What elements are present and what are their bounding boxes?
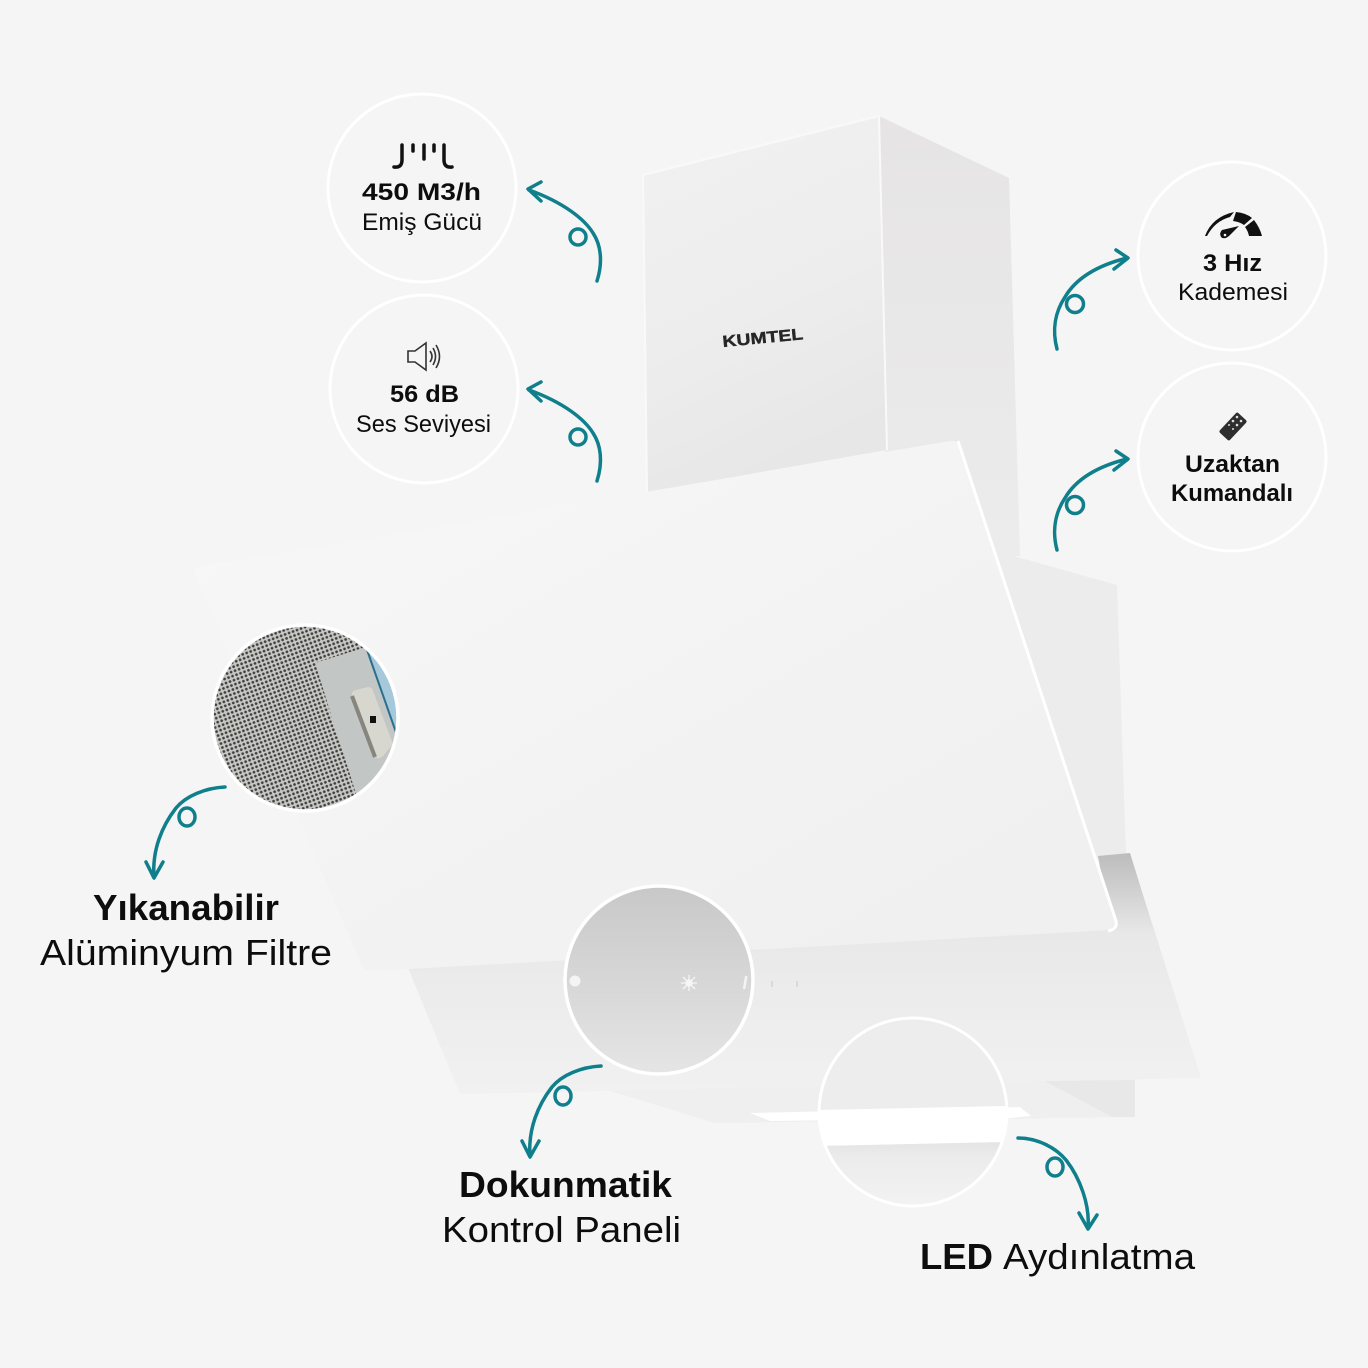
icon: speed gauge <box>1205 212 1262 238</box>
filter frame <box>315 648 395 794</box>
caption: Yıkanabilir Alüminyum Filtre: Yıkanabilir <box>93 887 279 928</box>
label: 56 dB: 56 dB <box>390 381 459 408</box>
caption: LED Aydınlatma: LED <box>920 1236 993 1277</box>
chimney side panel <box>879 116 1020 556</box>
detail circle: touch control panel <box>565 886 753 1074</box>
caption: Yıkanabilir Alüminyum Filtre <box>40 887 332 973</box>
detail circle: aluminium filter <box>210 624 400 812</box>
shaded wedge behind glass <box>1098 853 1155 934</box>
label: Kumandalı: Kumandalı <box>1171 480 1293 507</box>
callout: Uzaktan Kumandalı <box>1138 363 1326 551</box>
blue glass reflection <box>369 653 396 728</box>
label: 450 M3/h: 450 M3/h <box>362 179 481 206</box>
lower panel <box>408 853 1201 1094</box>
icon: speaker <box>408 343 440 370</box>
chimney front panel <box>643 116 887 492</box>
arrow: to Uzaktan Kumandalı <box>1055 451 1128 550</box>
label: 3 Hız: 3 Hız <box>1203 250 1262 277</box>
power button <box>570 976 580 986</box>
LED strip <box>750 1107 1031 1121</box>
caption: Yıkanabilir Alüminyum Filtre: Alüminyum Filtre <box>40 932 332 973</box>
glass front panel <box>194 441 1116 971</box>
product: cooker hood <box>194 116 1201 1123</box>
arrow: from LED circle <box>1018 1138 1097 1229</box>
light button <box>681 975 697 991</box>
caption: LED Aydınlatma: Aydınlatma <box>1003 1236 1196 1277</box>
label: Uzaktan: Uzaktan <box>1185 451 1280 478</box>
label: Emiş Gücü: Emiş Gücü <box>362 209 482 236</box>
caption: LED Aydınlatma <box>920 1236 1196 1277</box>
callout: 56 dB <box>330 295 518 483</box>
arrow: to 56 dB <box>528 382 600 481</box>
touch dots outside the circle <box>771 981 798 987</box>
arrow: to 450 M3/h <box>528 182 600 281</box>
caption: Dokunmatik Kontrol Paneli: Dokunmatik <box>459 1164 673 1205</box>
hood rear body <box>985 548 1126 862</box>
caption: Dokunmatik Kontrol Paneli <box>442 1164 681 1250</box>
icon: remote control <box>1219 412 1247 441</box>
lower underside shelf <box>600 1078 1135 1123</box>
detail circle: LED lighting <box>818 1017 1008 1210</box>
label: Kademesi: Kademesi <box>1178 279 1288 306</box>
arrow: from filter circle <box>146 787 225 878</box>
glass edge highlight <box>958 441 1116 931</box>
speed button <box>743 976 748 989</box>
arrow: to 3 Hız <box>1055 250 1128 349</box>
callout: 3 Hız <box>1138 162 1326 350</box>
brand logo: KUMTEL <box>722 326 804 351</box>
icon: airflow <box>394 145 452 167</box>
label: Ses Seviyesi: Ses Seviyesi <box>356 411 491 438</box>
arrow: from touch panel circle <box>522 1066 601 1157</box>
filter latch <box>352 687 393 758</box>
caption: Dokunmatik Kontrol Paneli: Kontrol Paneli <box>442 1209 681 1250</box>
callout: 450 M3/h <box>328 94 516 282</box>
